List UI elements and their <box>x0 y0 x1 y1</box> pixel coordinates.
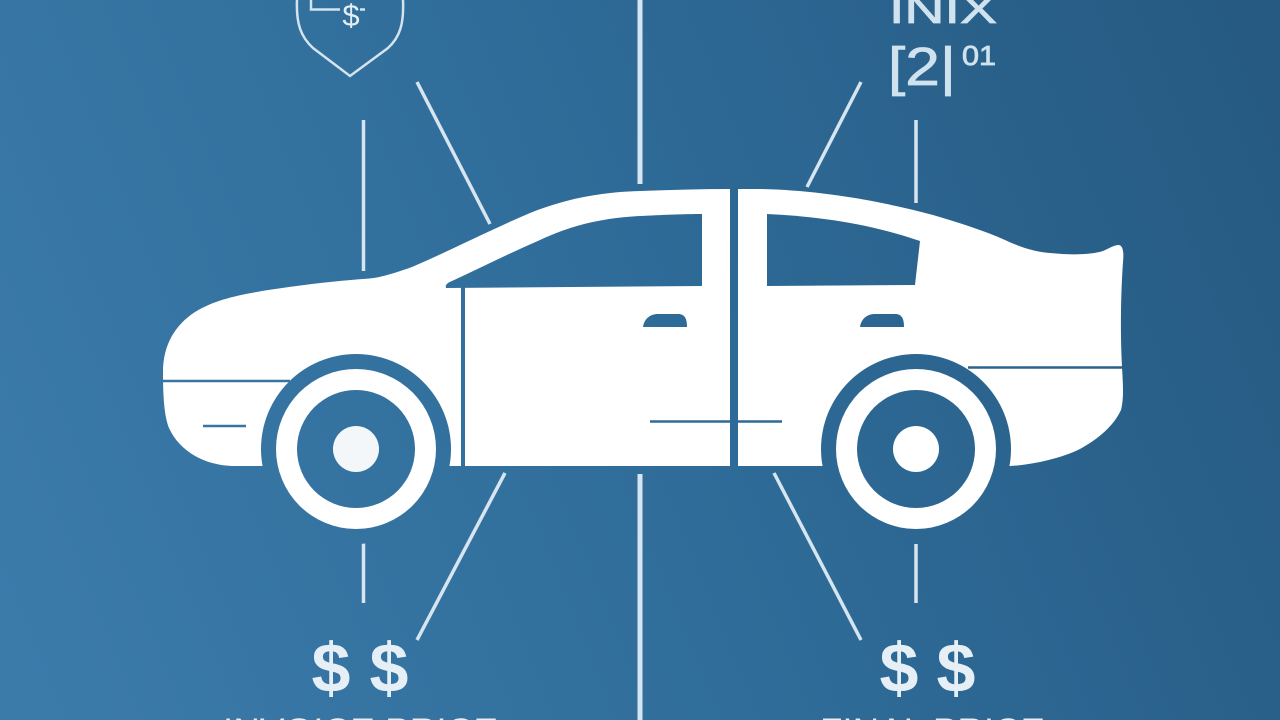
car body <box>163 189 1123 466</box>
right price dollars <box>880 629 975 707</box>
rear door handle <box>860 314 904 327</box>
connector lines: bottom <box>364 473 916 720</box>
left wheel <box>276 369 436 529</box>
rear window <box>767 214 920 286</box>
right wheel arch <box>821 354 1011 544</box>
connector lines: top <box>364 0 916 271</box>
icon: price shield <box>297 0 403 76</box>
icon: code text top right <box>888 0 997 97</box>
left wheel arch <box>261 354 451 544</box>
front door handle <box>643 314 687 327</box>
right price dollars: $ <box>937 629 975 707</box>
left price dollars: $ <box>312 629 350 707</box>
left price dollars <box>312 629 408 707</box>
icon: code text top right: 01 <box>962 40 996 71</box>
right price dollars: $ <box>880 629 918 707</box>
car illustration <box>163 186 1123 544</box>
door center gap <box>730 186 738 468</box>
door front seam <box>461 287 465 467</box>
left price dollars: $ <box>370 629 408 707</box>
front window <box>446 214 702 288</box>
icon: code text top right: [2| <box>888 37 956 97</box>
right wheel <box>836 369 996 529</box>
body detail lines <box>163 368 1123 426</box>
